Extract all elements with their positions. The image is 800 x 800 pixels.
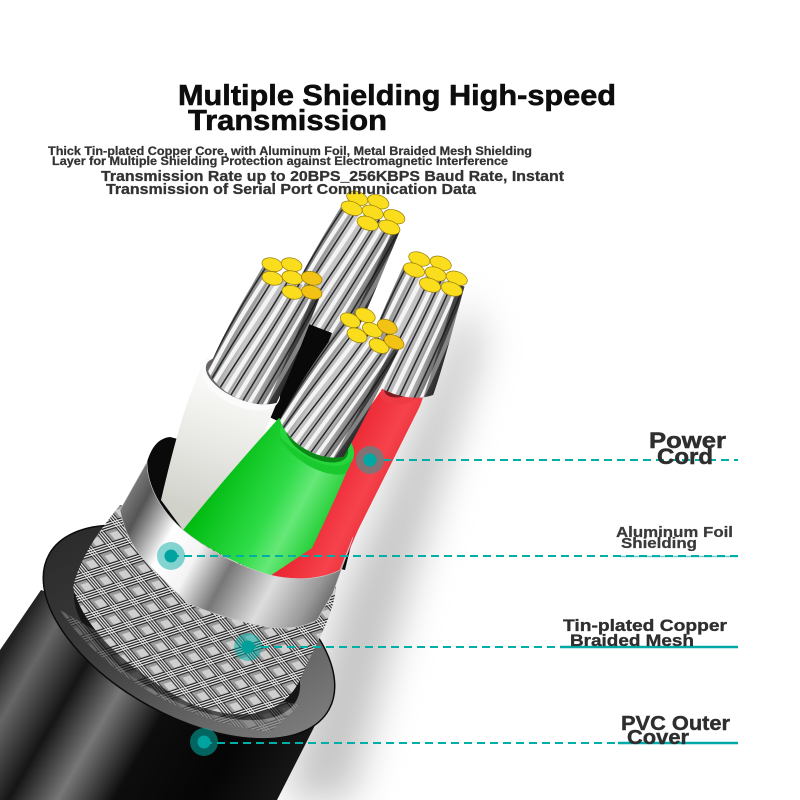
description: shielding bbox=[48, 146, 532, 168]
braided mesh reflection on disc bbox=[60, 610, 300, 732]
red wire bbox=[268, 374, 426, 582]
title: Transmission bbox=[188, 105, 387, 137]
bundle: left strands bbox=[196, 259, 331, 423]
PVC outer jacket bbox=[0, 590, 333, 800]
cable drop shadow bbox=[285, 300, 482, 800]
green wire bbox=[183, 402, 364, 576]
label: aluminum foil shielding: Shielding bbox=[621, 535, 697, 552]
braid opening bbox=[49, 527, 325, 753]
title: Multiple Shielding High-speed bbox=[178, 80, 616, 112]
callout marker: power cord bbox=[356, 446, 384, 474]
jacket end disc bbox=[8, 481, 370, 783]
label underlines bbox=[560, 556, 738, 743]
label: PVC outer cover: PVC Outer bbox=[621, 713, 730, 735]
yellow cores: right bbox=[401, 249, 469, 299]
title bbox=[178, 80, 616, 137]
label: tin-plated copper braided mesh bbox=[563, 616, 727, 650]
label: power cord: Power bbox=[649, 428, 726, 453]
label: PVC outer cover: Cover bbox=[627, 727, 689, 749]
callout marker: aluminum foil bbox=[157, 542, 185, 570]
tin-plated copper braided mesh bbox=[73, 505, 336, 714]
callout marker: braided mesh bbox=[234, 633, 262, 661]
foil cylinder interior bbox=[147, 437, 353, 570]
green rim front lip bbox=[280, 436, 352, 475]
callout lines bbox=[171, 460, 738, 743]
label: tin-plated copper braided mesh: Tin-plated Copper bbox=[563, 616, 727, 635]
description: transmission rate: Transmission of Serial Port Communication Data bbox=[106, 181, 477, 198]
description: shielding: Layer for Multiple Shielding Protection against Electromagnetic Interference bbox=[52, 156, 508, 168]
bundle: right strands bbox=[352, 259, 475, 414]
label: PVC outer cover bbox=[621, 713, 730, 749]
description: transmission rate: Transmission Rate up to 20BPS_256KBPS Baud Rate, Instant bbox=[101, 168, 564, 185]
bundle: back strands bbox=[274, 195, 410, 359]
white wire bbox=[161, 344, 289, 530]
label: power cord: Cord bbox=[657, 444, 713, 469]
label: power cord bbox=[649, 428, 726, 469]
bundle: front strands bbox=[266, 311, 409, 476]
label: tin-plated copper braided mesh: Braided Mesh bbox=[570, 631, 694, 650]
description: transmission rate bbox=[101, 168, 564, 198]
yellow cores: back bbox=[339, 188, 407, 237]
cable illustration bbox=[0, 188, 475, 800]
callout marker: PVC cover bbox=[190, 728, 218, 756]
label: aluminum foil shielding bbox=[616, 524, 733, 552]
description: shielding: Thick Tin-plated Copper Core, with Aluminum Foil, Metal Braided Mesh Shielding bbox=[48, 146, 532, 158]
aluminum foil band bbox=[120, 462, 353, 628]
black wire bbox=[255, 323, 332, 430]
yellow cores: front bbox=[338, 305, 406, 356]
label: aluminum foil shielding: Aluminum Foil bbox=[616, 524, 733, 541]
yellow cores: left bbox=[260, 256, 324, 301]
